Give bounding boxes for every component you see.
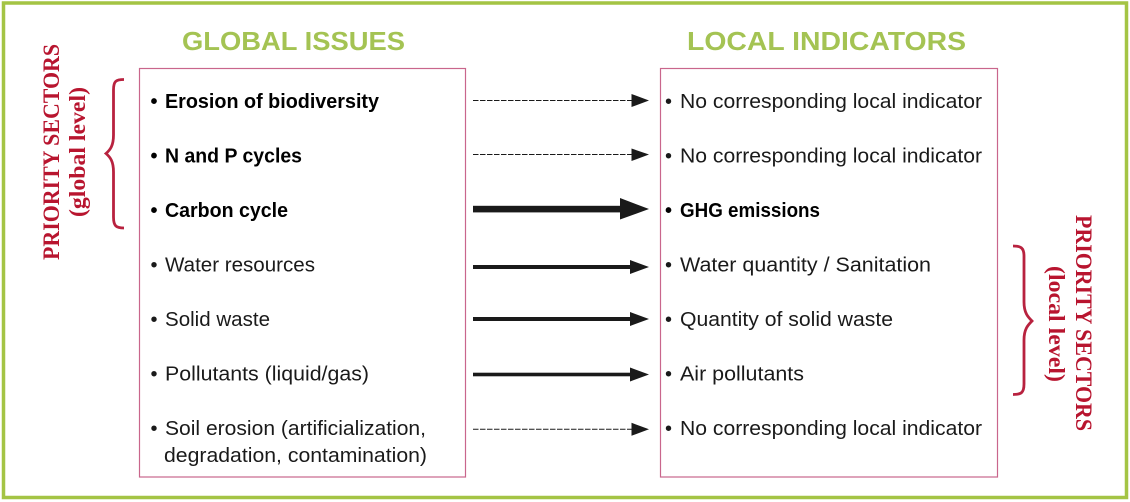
label: priority sectors global: (global level): [65, 87, 90, 217]
label: priority sectors local: (local level): [1044, 266, 1069, 382]
item: soil erosion: degradation, contamination): [164, 445, 427, 467]
label: priority sectors global: [39, 44, 90, 260]
label: priority sectors local: [1044, 215, 1096, 431]
indicator: water quantity: Water quantity / Sanitation: [680, 254, 931, 276]
indicator: none for biodiversity: No corresponding local indicator: [680, 91, 982, 113]
indicator: air pollutants: •: [665, 364, 672, 386]
indicator: none for soil erosion: •: [665, 418, 672, 440]
item: soil erosion: Soil erosion (artificialization,: [165, 418, 426, 440]
indicator: solid waste quantity: •: [665, 309, 672, 331]
item: pollutants: •: [150, 364, 158, 386]
indicator: GHG emissions: •: [665, 200, 672, 222]
item: N and P cycles: N and P cycles: [165, 146, 302, 168]
brace: local level: [1013, 246, 1032, 394]
indicator: none for N and P: No corresponding local indicator: [680, 146, 982, 168]
arrow: thick carbon: [473, 198, 649, 220]
item: soil erosion: •: [150, 418, 158, 440]
indicator: none for soil erosion: No corresponding local indicator: [680, 418, 982, 440]
panel: local indicators: [660, 68, 998, 477]
item: water resources: •: [150, 254, 158, 276]
arrow: pollutants: [473, 368, 649, 382]
item: erosion of biodiversity: Erosion of biodiversity: [165, 91, 380, 113]
heading: global issues: GLOBAL ISSUES: [182, 26, 405, 56]
indicator: GHG emissions: GHG emissions: [680, 200, 820, 222]
item: water resources: Water resources: [165, 254, 315, 276]
arrow: dashed biodiversity: [473, 94, 649, 107]
arrow: solid waste: [473, 312, 649, 326]
label: priority sectors global: PRIORITY SECTORS: [39, 44, 64, 260]
indicator: water quantity: •: [665, 254, 672, 276]
panel: global issues: [140, 68, 466, 477]
indicator: air pollutants: Air pollutants: [680, 364, 804, 386]
item: carbon cycle: Carbon cycle: [165, 200, 288, 222]
arrow: dashed soil: [473, 423, 649, 436]
arrow: water: [473, 260, 649, 274]
label: priority sectors local: PRIORITY SECTORS: [1071, 215, 1096, 431]
item: solid waste: •: [150, 309, 158, 331]
arrow: dashed nutrient cycles: [473, 148, 649, 161]
brace: global level: [106, 80, 124, 228]
item: carbon cycle: •: [150, 200, 158, 222]
item: solid waste: Solid waste: [165, 309, 270, 331]
item: pollutants: Pollutants (liquid/gas): [165, 364, 369, 386]
heading: local indicators: LOCAL INDICATORS: [687, 26, 966, 56]
indicator: solid waste quantity: Quantity of solid waste: [680, 309, 893, 331]
item: N and P cycles: •: [150, 146, 158, 168]
indicator: none for biodiversity: •: [665, 91, 672, 113]
indicator: none for N and P: •: [665, 146, 672, 168]
item: erosion of biodiversity: •: [150, 91, 158, 113]
